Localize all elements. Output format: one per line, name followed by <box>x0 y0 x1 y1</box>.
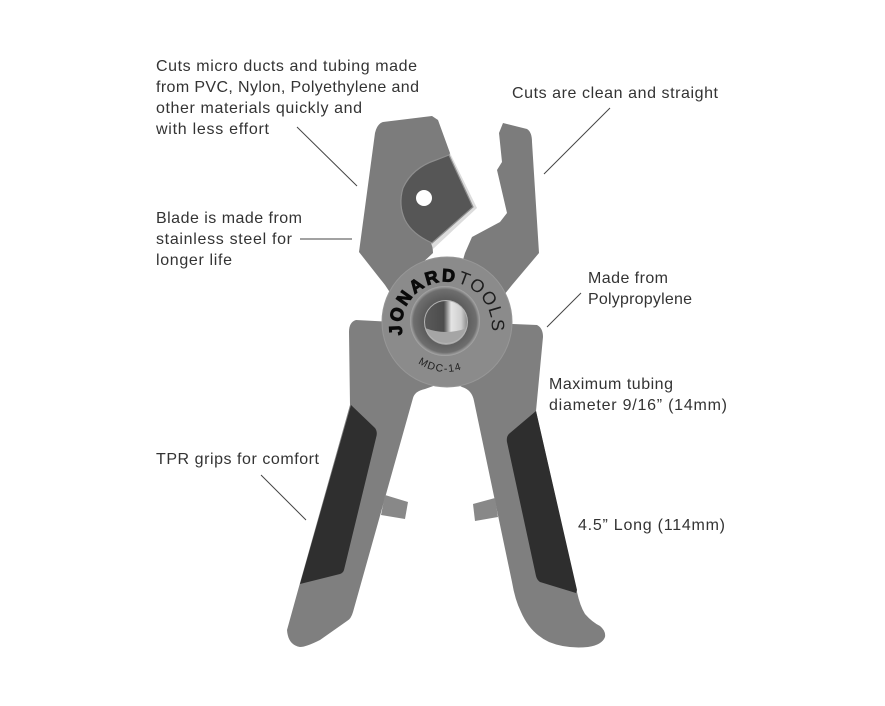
pivot hub <box>382 257 512 387</box>
pivot dome <box>424 300 468 345</box>
callout: maximum tubing diameter: Maximum tubing <box>549 376 673 393</box>
callout: clean cuts <box>512 85 719 174</box>
right grip <box>507 411 577 593</box>
callout: blade: longer life <box>156 252 232 269</box>
model number: MDC-14 <box>418 357 460 372</box>
right handle <box>440 322 605 647</box>
callout: clean cuts: Cuts are clean and straight <box>512 85 719 102</box>
callout: maximum tubing diameter <box>549 376 727 414</box>
callout: blade <box>156 210 352 269</box>
callout: blade: Blade is made from <box>156 210 302 227</box>
callout: TPR grips <box>156 451 320 520</box>
logo: JONARD TOOLS: JONARDTOOLS <box>388 268 504 336</box>
blade <box>401 153 477 249</box>
callout: TPR grips: TPR grips for comfort <box>156 451 320 468</box>
left handle <box>287 320 450 647</box>
tool: cable cutter <box>287 116 606 648</box>
callout: cuts micro ducts: other materials quickly and <box>156 100 362 117</box>
pivot ring <box>410 286 480 356</box>
callout: length: 4.5” Long (114mm) <box>578 517 725 534</box>
callout: blade: stainless steel for <box>156 231 293 248</box>
right jaw <box>460 123 539 300</box>
left grip <box>300 405 377 584</box>
callout: cuts micro ducts <box>155 58 419 186</box>
left pin <box>381 495 408 519</box>
callout: cuts micro ducts: from PVC, Nylon, Polyethylene and <box>156 79 419 96</box>
left jaw <box>359 116 450 300</box>
callout: cuts micro ducts: Cuts micro ducts and tubing made <box>156 58 417 75</box>
callout: polypropylene: Polypropylene <box>588 291 692 308</box>
callout: maximum tubing diameter: diameter 9/16” (14mm) <box>549 397 727 414</box>
right pin <box>473 498 498 521</box>
callout: polypropylene <box>547 270 692 327</box>
callout: cuts micro ducts: with less effort <box>155 121 270 138</box>
callout: polypropylene: Made from <box>588 270 668 287</box>
